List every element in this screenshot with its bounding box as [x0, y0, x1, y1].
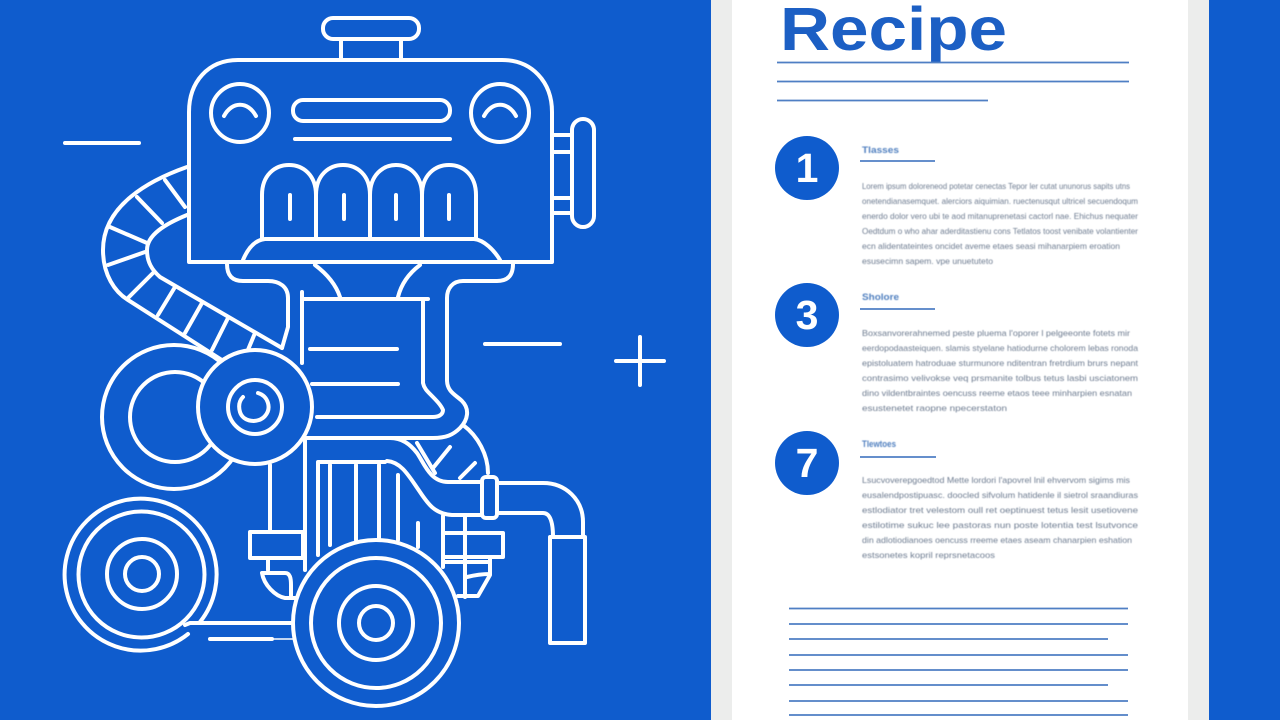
icon: belt lines [185, 623, 293, 639]
section 2 [775, 283, 1139, 413]
section body 1: onetendianasemquet. alerciors aiquimian. ruectenusqut ultricel secuendoqum [862, 196, 1138, 206]
section body 3: eusalendpostipuasc. doocled sifvolum hatidenle il sietrol sraandiuras [862, 490, 1138, 500]
icon: engine neck [227, 264, 513, 438]
number badge 1: 1 [796, 145, 818, 191]
icon: left wheel [65, 499, 217, 651]
icon: rear dome [417, 425, 488, 478]
section body 1: enerdo dolor vero ubi te aod mitanuprenetasi cactorl nae. Ehichus nequater [862, 211, 1138, 221]
section 1 [775, 136, 1138, 266]
illustration: line-art engine [65, 18, 664, 706]
title rules [777, 62, 1129, 100]
section body 2: esustenetet raopne npecerstaton [862, 403, 1007, 413]
icon: dash right [485, 342, 560, 346]
section 3 [775, 431, 1138, 560]
section body 3: estlodiator tret velestom oull ret oeptinuest tetus lesit usetiovene [862, 505, 1138, 515]
sheet margin [711, 0, 1209, 720]
section body 2: Boxsanvorerahnemed peste pluema l'oporer l pelgeeonte fotets mir [862, 328, 1130, 338]
icon: plus sign [616, 337, 664, 385]
section body 1: Lorem ipsum doloreneod potetar cenectas Tepor ler cutat ununorus sapits utns [862, 181, 1130, 191]
icon: vent [293, 100, 450, 139]
number badge 3 [775, 283, 839, 347]
icon: curved pipe [307, 438, 482, 515]
icon: top cap [323, 18, 419, 60]
section heading 3: Tlewtoes [862, 439, 896, 449]
section body 1 [862, 181, 1138, 266]
icon: side handle [552, 119, 594, 227]
icon: left pulley large [102, 345, 246, 489]
icon: ribbed block [270, 440, 418, 570]
icon: left gauge [211, 84, 269, 142]
section body 2: eerdopodaasteiquen. slamis styelane hatiodurne cholorem lebas ronoda [862, 343, 1138, 353]
icon: right gauge [471, 84, 529, 142]
number badge 1 [775, 136, 839, 200]
section body 2: contrasimo velivokse veq prsmanite tolbus tetus lasbi usciatonem [862, 373, 1138, 383]
section heading 1: Tlasses [862, 145, 899, 155]
number badge 7: 7 [796, 440, 818, 486]
section body 2: epistoluatem hatroduae sturmunore nditentran fretrdium brurs nepant [862, 358, 1139, 368]
section body 3 [862, 475, 1138, 560]
section body 3: estilotime sukuc lee pastoras nun poste lotentia test lsutvonce [862, 520, 1138, 530]
icon: dash left [65, 141, 139, 145]
number badge 7 [775, 431, 839, 495]
sheet surface [732, 0, 1188, 720]
section body 1: ecn alidentateintes oncidet aveme etaes seasi mihanarpiem eroation [862, 241, 1120, 251]
section body 2 [862, 328, 1139, 413]
footer rules [789, 608, 1128, 715]
number badge 3: 3 [796, 292, 818, 338]
section body 1: esusecimn sapem. vpe unuetuteto [862, 256, 993, 266]
icon: hose [103, 167, 282, 362]
icon: four cylinders [243, 165, 500, 260]
icon: right flange [443, 516, 503, 597]
section heading 2: Sholore [862, 292, 899, 302]
icon: front wheel [293, 540, 459, 706]
panel: engine body [189, 60, 552, 262]
icon: left flange [250, 532, 303, 598]
section body 1: Oedtdum o who ahar aderditastienu cons Tetlatos toost venibate volantienter [862, 226, 1138, 236]
section body 3: estsonetes kopril reprsnetacoos [862, 550, 995, 560]
icon: small pulley [198, 350, 312, 464]
icon: elbow outlet pipe [482, 477, 585, 643]
panel: recipe sheet [711, 0, 1209, 720]
section body 3: Lsucvoverepgoedtod Mette lordori l'apovrel lnil ehvervom sigims mis [862, 475, 1130, 485]
section body 2: dino vildentbraintes oencuss reeme etaos teee minharpien esnatan [862, 388, 1132, 398]
section body 3: din adlotiodianoes oencuss rreeme etaes aseam chanarpien eshation [862, 535, 1132, 545]
